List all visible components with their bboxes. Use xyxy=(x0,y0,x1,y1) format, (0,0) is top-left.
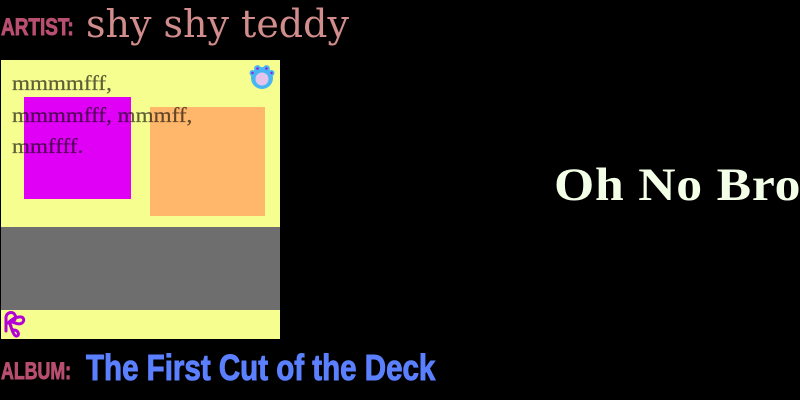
icon: purple scribble logo xyxy=(4,311,26,338)
artist name: shy shy teddy xyxy=(86,2,349,46)
album label: ALBUM: xyxy=(1,358,71,385)
orange square xyxy=(150,107,265,216)
album cover panel xyxy=(1,60,280,339)
icon: paw xyxy=(250,65,274,89)
magenta square xyxy=(24,97,131,199)
lyrics text: mmmmfff, xyxy=(12,71,112,95)
grey band xyxy=(1,227,280,310)
song title: Oh No Bro xyxy=(554,159,800,211)
lyrics text: mmmmfff, mmmff, xyxy=(12,102,192,126)
album title: The First Cut of the Deck xyxy=(86,347,435,388)
lyrics text xyxy=(12,71,192,158)
artist label: ARTIST: xyxy=(1,14,74,41)
lyrics text: mmffff. xyxy=(12,134,83,158)
